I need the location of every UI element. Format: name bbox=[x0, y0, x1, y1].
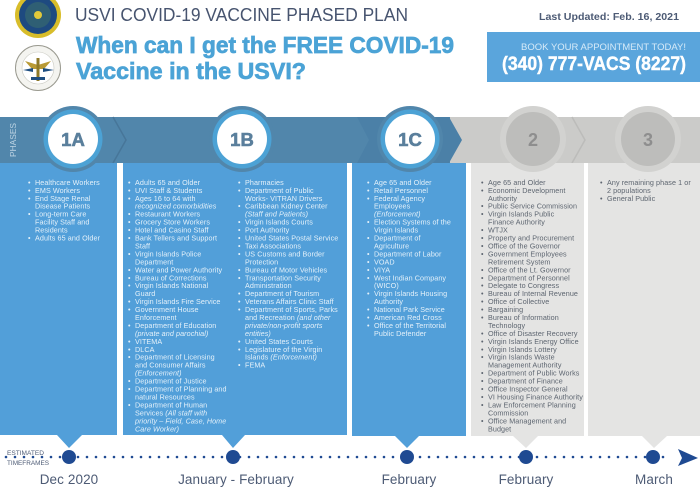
title: USVI COVID-19 VACCINE PHASED PLAN bbox=[75, 4, 408, 25]
list: phase 1B first column: • bbox=[128, 178, 131, 187]
list: phase 1B second column: • bbox=[238, 226, 241, 235]
panel: phase 1C: (WICO) bbox=[374, 281, 399, 290]
list: phase 1B second column: • bbox=[238, 345, 241, 354]
panel: phase 2: • bbox=[481, 186, 484, 195]
list: phase 1B second column: • bbox=[238, 218, 241, 227]
panel: phase 3: 2 populations bbox=[607, 186, 651, 195]
list: phase 1B second column: Bureau of Motor Vehicles bbox=[245, 265, 328, 274]
label: estimated timeframes: TIMEFRAMES bbox=[7, 461, 49, 467]
list: phase 1B second column: • bbox=[238, 273, 241, 282]
list: phase 1B first column: • bbox=[128, 321, 131, 330]
panel: phase 1C: • bbox=[367, 186, 370, 195]
panel: phase 2: WTJX bbox=[488, 226, 508, 235]
list: phase 1B first column: Enforcement bbox=[135, 313, 177, 322]
badge: phase 3 bbox=[615, 106, 681, 172]
timeframe labels: March bbox=[635, 472, 673, 487]
list: phase 1B second column: United States Postal Service bbox=[245, 234, 338, 242]
panel: phase 2: • bbox=[481, 241, 484, 250]
list: phase 1B second column: Veterans Affairs Clinic Staff bbox=[245, 297, 334, 306]
list: phase 1B first column: Virgin Islands National bbox=[135, 281, 209, 290]
list: phase 1B second column: • bbox=[238, 202, 241, 211]
panel: phase 2: • bbox=[481, 377, 484, 386]
panel: phase 2: Age 65 and Older bbox=[488, 178, 546, 187]
callout: booking phone number: (340) 777-VACS (8227) bbox=[502, 54, 686, 75]
panel: phase 2: • bbox=[481, 178, 484, 187]
panel: phase 2: • bbox=[481, 392, 484, 401]
list: phase 1B first column: Hotel and Casino Staff bbox=[135, 226, 209, 235]
panel: phase 1C: Election Systems of the bbox=[374, 218, 451, 227]
list: phase 1B first column: Department bbox=[135, 257, 173, 266]
panel: phase 2: Bargaining bbox=[488, 305, 523, 314]
panel: phase 1C: • bbox=[367, 194, 370, 203]
panel: phase 2: Finance Authority bbox=[488, 218, 545, 227]
list: phase 1B second column: Taxi Associations bbox=[245, 241, 301, 250]
list: phase 1B second column: Protection bbox=[245, 257, 278, 266]
label: estimated timeframes bbox=[7, 451, 49, 467]
list: phase 1B second column: • bbox=[238, 297, 241, 306]
panel: phase 1C: • bbox=[367, 257, 370, 266]
timeframe labels: Dec 2020 bbox=[40, 472, 98, 487]
panel: phase 2: Virgin Islands Public bbox=[488, 210, 555, 219]
panel: phase 1C: Agriculture bbox=[374, 241, 409, 250]
panel: phase 2: • bbox=[481, 353, 484, 362]
list: phase 1B first column: Bureau of Corrections bbox=[135, 273, 207, 282]
panel: phase 2: • bbox=[481, 202, 484, 211]
list: phase 1B first column: Water and Power Authority bbox=[135, 265, 223, 274]
panel: phase 2: Virgin Islands Lottery bbox=[488, 345, 557, 354]
panel: phase 2: • bbox=[481, 345, 484, 354]
list: phase 1B first column: recognized comorbidities bbox=[135, 202, 217, 211]
label: estimated timeframes: ESTIMATED bbox=[7, 451, 45, 457]
panel: phase 2: • bbox=[481, 265, 484, 274]
panel: phase 1C: • bbox=[367, 218, 370, 227]
panel: phase 1A: End Stage Renal bbox=[35, 194, 91, 203]
list: phase 1B first column: • bbox=[128, 273, 131, 282]
list: phase 1B first column: • bbox=[128, 281, 131, 290]
list: phase 1B second column: • bbox=[238, 289, 241, 298]
panel: phase 2: • bbox=[481, 400, 484, 409]
panel: phase 2: Office of the Lt. Governor bbox=[488, 265, 571, 274]
list: phase 1B first column: • bbox=[128, 226, 131, 235]
list: phase 1B second column: US Customs and Border bbox=[245, 249, 325, 258]
icon: health department seal bbox=[16, 46, 60, 90]
badge: phase 1B bbox=[209, 106, 275, 172]
panel: phase 1C: American Red Cross bbox=[374, 313, 442, 322]
panel: phase 1C: • bbox=[367, 289, 370, 298]
list: phase 1B first column: DLCA bbox=[135, 345, 155, 354]
badge: phase 1B: 1B bbox=[230, 129, 254, 150]
panel: phase 1C: Department of bbox=[374, 234, 421, 242]
badge: phase 1A: 1A bbox=[61, 129, 85, 150]
panel: phase 2: Law Enforcement Planning bbox=[488, 400, 576, 409]
panel: phase 2: Commission bbox=[488, 408, 528, 417]
panel: phase 2: Virgin Islands Energy Office bbox=[488, 337, 579, 346]
panel: phase 2: • bbox=[481, 297, 484, 306]
panel: phase 2: Property and Procurement bbox=[488, 234, 574, 242]
list: phase 1B first column: • bbox=[128, 265, 131, 274]
badge: phase 1C bbox=[377, 106, 443, 172]
panel: phase 2: Retirement System bbox=[488, 257, 550, 266]
list: phase 1B second column: entities) bbox=[245, 329, 271, 338]
timeframe labels: February bbox=[382, 472, 437, 487]
panel: phase 2: • bbox=[481, 369, 484, 378]
badge: phase 3: 3 bbox=[643, 130, 653, 150]
heading bbox=[76, 32, 454, 84]
badge: phase 2 bbox=[500, 106, 566, 172]
list: phase 1B first column: • bbox=[128, 194, 131, 203]
panel: phase 2: Virgin Islands Waste bbox=[488, 353, 555, 362]
panel: phase 2: • bbox=[481, 273, 484, 282]
panel: phase 1C: • bbox=[367, 273, 370, 282]
panel: phase 2: • bbox=[481, 305, 484, 314]
panel: phase 1C: Virgin Islands bbox=[374, 226, 418, 235]
timeframe labels: February bbox=[499, 472, 554, 487]
heading: When can I get the FREE COVID-19 bbox=[76, 32, 454, 58]
list: phase 1B second column: • bbox=[238, 337, 241, 346]
panel: phase 1B bbox=[123, 163, 347, 448]
panel: phase 2: VI Housing Finance Authority bbox=[488, 392, 583, 401]
panel: phase 2: • bbox=[481, 234, 484, 242]
panel: phase 2: Authority bbox=[488, 194, 517, 203]
panel: phase 1C: • bbox=[367, 321, 370, 330]
panel: phase 1C bbox=[352, 163, 466, 448]
callout: booking phone number bbox=[487, 32, 700, 82]
list: phase 1B first column: • bbox=[128, 353, 131, 362]
panel: phase 3: Any remaining phase 1 or bbox=[607, 178, 691, 187]
panel: phase 2: Office of Collective bbox=[488, 297, 549, 306]
timeframe labels bbox=[40, 472, 673, 487]
panel: phase 1A: Facility Staff and bbox=[35, 218, 89, 227]
panel: phase 1C: • bbox=[367, 313, 370, 322]
panel: phase 1A: • bbox=[28, 194, 31, 203]
panel: phase 2: Department of Public Works bbox=[488, 369, 580, 378]
list: phase 1B second column: Pharmacies bbox=[245, 178, 284, 187]
list: phase 1B first column: Government House bbox=[135, 305, 199, 314]
list: phase 1B second column: Port Authority bbox=[245, 226, 290, 235]
panel: phase 2: • bbox=[481, 210, 484, 219]
phase band bbox=[0, 117, 700, 163]
panel: phase 2: • bbox=[481, 385, 484, 394]
panel: phase 1A: Residents bbox=[35, 226, 68, 235]
panel: phase 3: • bbox=[600, 178, 603, 187]
list: phase 1B second column: United States Courts bbox=[245, 337, 313, 346]
list: phase 1B first column: Staff bbox=[135, 241, 150, 250]
list: phase 1B second column: Department of Sports, Parks bbox=[245, 305, 338, 314]
panel: phase 2: • bbox=[481, 249, 484, 258]
badge: phase 1C: 1C bbox=[398, 129, 422, 150]
panel: phase 1C: Public Defender bbox=[374, 329, 427, 338]
panel: phase 1A: • bbox=[28, 210, 31, 219]
list: phase 1B first column: Department of Human bbox=[135, 400, 207, 409]
timeframe labels: January - February bbox=[178, 472, 294, 487]
arrow: timeline end bbox=[678, 449, 698, 466]
list: phase 1B second column: • bbox=[238, 178, 241, 187]
list: phase 1B first column: (private and parochial) bbox=[135, 329, 208, 338]
list: phase 1B first column: Department of Justice bbox=[135, 377, 207, 386]
panel: phase 1C: • bbox=[367, 234, 370, 242]
panel: phase 1C: Office of the Territorial bbox=[374, 321, 446, 330]
icon: top government seal bbox=[15, 0, 61, 38]
panel: phase 1C: Age 65 and Older bbox=[374, 178, 432, 187]
list: phase 1B first column: • bbox=[128, 297, 131, 306]
last updated date: Last Updated: Feb. 16, 2021 bbox=[539, 11, 679, 23]
panel: phase 2: • bbox=[481, 329, 484, 338]
panel: phase 1C: Employees bbox=[374, 202, 411, 211]
list: phase 1B first column: • bbox=[128, 218, 131, 227]
list: phase 1B second column: • bbox=[238, 265, 241, 274]
badge: phase 2: 2 bbox=[528, 130, 538, 150]
list: phase 1B second column: • bbox=[238, 361, 241, 370]
list: phase 1B second column: • bbox=[238, 186, 241, 195]
panel: phase 2: • bbox=[481, 313, 484, 322]
list: phase 1B second column: Caribbean Kidney Center bbox=[245, 202, 328, 211]
panel: phase 1C: Federal Agency bbox=[374, 194, 425, 203]
panel: phase 2: • bbox=[481, 226, 484, 235]
panel: phase 1C: National Park Service bbox=[374, 305, 445, 314]
list: phase 1B second column: Works- VITRAN Drivers bbox=[245, 194, 323, 203]
list: phase 1B first column: Department of Planning and bbox=[135, 385, 227, 394]
panel: phase 3 bbox=[588, 163, 700, 448]
panel: phase 1C: Retail Personnel bbox=[374, 186, 428, 195]
list: phase 1B first column: Ages 16 to 64 with bbox=[135, 194, 196, 203]
list: phase 1B first column: • bbox=[128, 345, 131, 354]
list: phase 1B second column: private/non-profit sports bbox=[244, 321, 323, 330]
list: phase 1B first column: • bbox=[128, 337, 131, 346]
panel: phase 1C: • bbox=[367, 249, 370, 258]
panel: phase 1A: Long-term Care bbox=[35, 210, 86, 219]
panel: phase 3: • bbox=[600, 194, 603, 203]
callout: booking phone number: BOOK YOUR APPOINTMENT TODAY! bbox=[521, 42, 686, 52]
panel: phase 2: Management Authority bbox=[488, 361, 562, 370]
list: phase 1B first column: natural Resources bbox=[135, 392, 195, 401]
list: phase 1B first column: Care Worker) bbox=[135, 424, 179, 433]
list: phase 1B second column: Islands (Enforcement) bbox=[245, 353, 317, 362]
panel: phase 2: Government Employees bbox=[488, 249, 567, 258]
list: phase 1B second column: • bbox=[238, 249, 241, 258]
list: phase 1B second column: Transportation Security bbox=[245, 273, 321, 282]
panel: phase 2: Public Service Commission bbox=[488, 202, 577, 211]
panel: phase 1A: Adults 65 and Older bbox=[35, 234, 101, 242]
list: phase 1B second column: and Recreation (and other bbox=[245, 313, 331, 322]
list: phase 1B second column: (Staff and Patients) bbox=[245, 210, 308, 219]
panel: phase 2: • bbox=[481, 337, 484, 346]
list: phase 1B second column: Virgin Islands Courts bbox=[245, 218, 313, 227]
list: phase 1B first column: priority – Field, Case, Home bbox=[134, 416, 226, 425]
panel: phase 1A bbox=[0, 163, 117, 448]
panel: phase 2: Department of Personnel bbox=[488, 273, 570, 282]
panel: phase 2: Budget bbox=[488, 424, 511, 433]
panel: phase 2: Office of the Governor bbox=[488, 241, 561, 250]
panel: phase 1C: VIYA bbox=[374, 265, 390, 274]
panel: phase 1A: • bbox=[28, 186, 31, 195]
panel: phase 1C: • bbox=[367, 305, 370, 314]
list: phase 1B first column: • bbox=[128, 305, 131, 314]
list: phase 1B first column: Bank Tellers and Support bbox=[135, 234, 217, 242]
panel: phase 2: • bbox=[481, 416, 484, 425]
panel: phase 1C: Virgin Islands Housing bbox=[374, 289, 447, 298]
panel: phase 1C: (Enforcement) bbox=[374, 210, 421, 219]
panel: phase 1C: Authority bbox=[374, 297, 403, 306]
panel: phase 1C: West Indian Company bbox=[374, 273, 446, 282]
panel: phase 2: Office Management and bbox=[488, 416, 566, 425]
list: phase 1B second column: • bbox=[238, 234, 241, 242]
panel: phase 1A: EMS Workers bbox=[35, 186, 80, 195]
list: phase 1B first column: Grocery Store Workers bbox=[135, 218, 210, 227]
list: phase 1B first column: Virgin Islands Fire Service bbox=[135, 297, 221, 306]
phases label: PHASES bbox=[8, 123, 18, 157]
panel: phase 1C: • bbox=[367, 265, 370, 274]
panel: phase 2: Economic Development bbox=[488, 186, 566, 195]
panel: phase 2: Bureau of Information bbox=[488, 313, 559, 322]
panel: phase 1A: • bbox=[28, 234, 31, 242]
list: phase 1B second column: Department of Public bbox=[245, 186, 314, 195]
list: phase 1B second column: FEMA bbox=[245, 361, 265, 370]
list: phase 1B first column: Adults 65 and Older bbox=[135, 178, 201, 187]
list: phase 1B first column: Services (All staff with bbox=[135, 408, 207, 417]
panel: phase 1C: VOAD bbox=[374, 257, 395, 266]
list: phase 1B second column: • bbox=[238, 241, 241, 250]
panel: phase 2: Bureau of Internal Revenue bbox=[488, 289, 578, 298]
list: phase 1B first column: • bbox=[128, 377, 131, 386]
list: phase 1B second column: Legislature of the Virgin bbox=[245, 345, 322, 354]
list: phase 1B second column: • bbox=[238, 305, 241, 314]
panel: phase 2: Department of Finance bbox=[488, 377, 563, 386]
timeline bbox=[6, 449, 698, 466]
panel: phase 2: • bbox=[481, 281, 484, 290]
list: phase 1B first column: and Consumer Affairs bbox=[135, 361, 206, 370]
panel: phase 2: Office Inspector General bbox=[488, 385, 568, 394]
list: phase 1B first column: • bbox=[128, 210, 131, 219]
panel: phase 2 bbox=[471, 163, 585, 448]
list: phase 1B first column: Guard bbox=[135, 289, 155, 298]
list: phase 1B first column: • bbox=[128, 186, 131, 195]
badge: phase 1A bbox=[40, 106, 106, 172]
list: phase 1B first column: • bbox=[128, 400, 131, 409]
list: phase 1B first column: UVI Staff & Students bbox=[135, 186, 203, 195]
panel: phase 1C: Department of Labor bbox=[374, 249, 442, 258]
panel: phase 3: General Public bbox=[607, 194, 656, 203]
panel: phase 1A: Healthcare Workers bbox=[35, 178, 100, 187]
panel: phase 1C: • bbox=[367, 178, 370, 187]
list: phase 1B first column: (Enforcement) bbox=[135, 369, 182, 378]
list: phase 1B first column: • bbox=[128, 249, 131, 258]
list: phase 1B first column: Department of Licensing bbox=[135, 353, 215, 362]
panel: phase 2: Technology bbox=[488, 321, 525, 330]
panel: phase 2: • bbox=[481, 289, 484, 298]
panel: phase 1A: Disease Patients bbox=[35, 202, 91, 211]
list: phase 1B first column: Restaurant Workers bbox=[135, 210, 201, 219]
list: phase 1B first column: Virgin Islands Police bbox=[135, 249, 201, 258]
panel: phase 1A: • bbox=[28, 178, 31, 187]
list: phase 1B first column: • bbox=[128, 234, 131, 242]
panel: phase 2: Office of Disaster Recovery bbox=[488, 329, 578, 338]
panel: phase 2: Delegate to Congress bbox=[488, 281, 559, 290]
list: phase 1B first column: • bbox=[128, 385, 131, 394]
heading: Vaccine in the USVI? bbox=[76, 58, 306, 84]
list: phase 1B second column: Administration bbox=[245, 281, 292, 290]
list: phase 1B first column: VITEMA bbox=[135, 337, 162, 346]
list: phase 1B first column: Department of Education bbox=[135, 321, 216, 330]
list: phase 1B second column: Department of Tourism bbox=[245, 289, 319, 298]
